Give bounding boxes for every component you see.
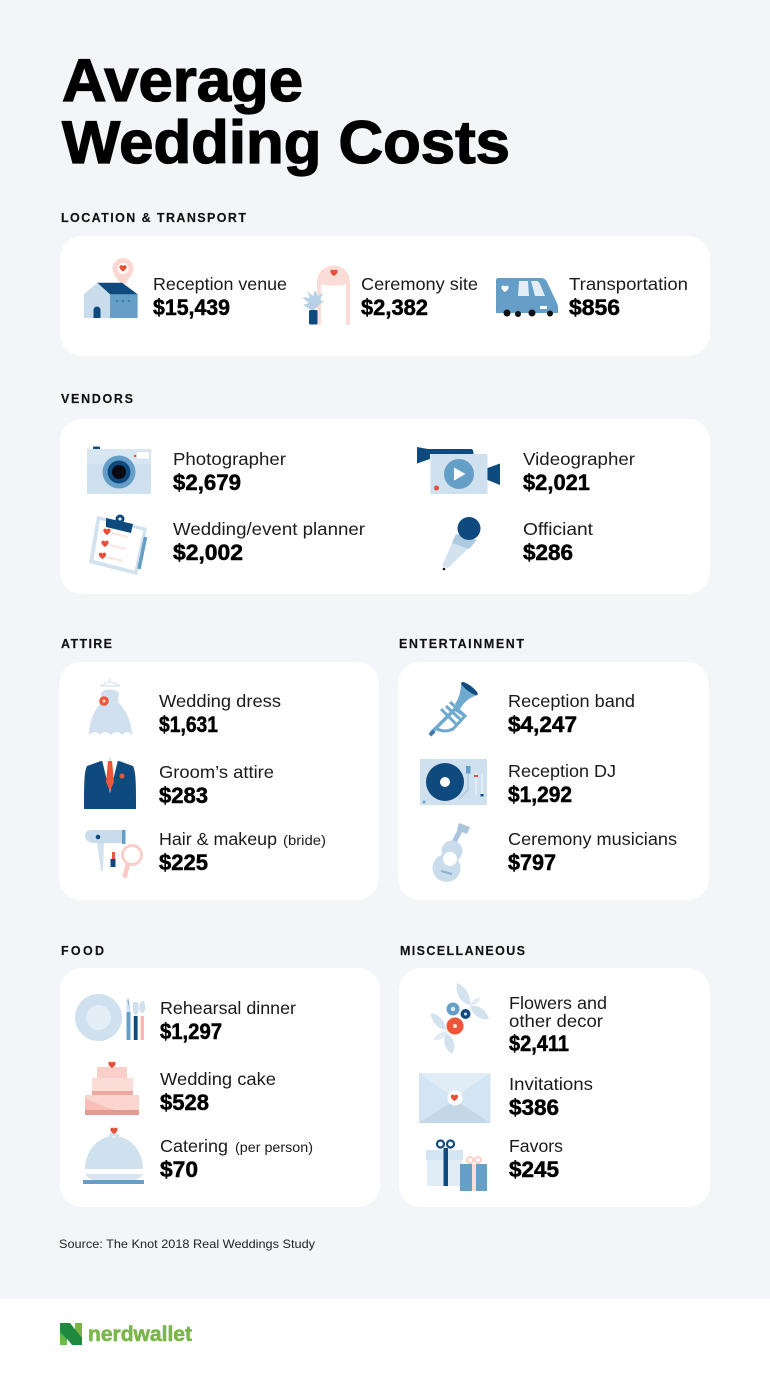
icon: invitation envelope — [419, 1073, 490, 1123]
text: groom's attire — [159, 762, 274, 808]
icon: clipboard — [89, 514, 147, 575]
text: wedding cake: $528 — [160, 1090, 209, 1115]
text: groom's attire: Groom’s attire — [159, 762, 274, 782]
text: wedding/event planner — [173, 519, 365, 565]
icon: wedding dress — [89, 678, 132, 735]
text: reception dj — [508, 761, 616, 807]
text: invitations: $386 — [509, 1095, 559, 1120]
icon: camera — [87, 446, 151, 494]
text: videographer: $2,021 — [523, 470, 590, 495]
text: wedding/event planner: $2,002 — [173, 540, 243, 565]
icon: microphone — [442, 517, 480, 570]
logo mark — [60, 1323, 82, 1345]
icon: hair and makeup — [85, 830, 142, 876]
text: flowers and other decor — [509, 993, 607, 1056]
text: favors: Favors — [509, 1136, 563, 1156]
icon: trumpet — [428, 680, 479, 737]
text: hair and makeup: (bride) — [283, 833, 326, 848]
text: ceremony site — [361, 274, 478, 320]
text: rehearsal dinner — [160, 998, 296, 1044]
text: reception band: Reception band — [508, 691, 635, 711]
text: officiant: $286 — [523, 540, 573, 565]
text: ceremony site: Ceremony site — [361, 274, 478, 294]
text: ceremony musicians: Ceremony musicians — [508, 829, 677, 849]
text: catering: Catering — [160, 1136, 228, 1156]
text: ceremony musicians — [508, 829, 677, 875]
text: photographer: $2,679 — [173, 470, 241, 495]
text: hair and makeup — [159, 829, 326, 875]
text: catering — [160, 1136, 313, 1182]
text: catering: $70 — [160, 1157, 198, 1182]
source note: Source: The Knot 2018 Real Weddings Study — [59, 1237, 315, 1251]
icon: place setting — [75, 994, 145, 1041]
text: videographer — [523, 449, 635, 495]
text: ceremony site: $2,382 — [361, 295, 428, 320]
title: Wedding Costs — [62, 109, 510, 176]
text: catering: (per person) — [235, 1140, 313, 1155]
text: reception venue: $15,439 — [153, 295, 230, 320]
text: transportation — [569, 274, 688, 320]
text: wedding cake: Wedding cake — [160, 1069, 276, 1089]
heading: food: FOOD — [61, 944, 104, 958]
text: photographer: Photographer — [173, 449, 286, 469]
text: groom's attire: $283 — [159, 783, 208, 808]
icon: catering cloche — [83, 1128, 144, 1184]
heading: vendors: VENDORS — [61, 392, 133, 406]
heading: miscellaneous: MISCELLANEOUS — [400, 944, 525, 958]
icon: favors gifts — [426, 1140, 487, 1191]
text: hair and makeup: $225 — [159, 850, 208, 875]
heading: attire: ATTIRE — [61, 637, 112, 651]
icon: guitar — [432, 823, 470, 882]
title: Average — [62, 47, 303, 114]
text: favors — [509, 1136, 563, 1182]
logo wordmark: nerdwallet — [88, 1323, 192, 1346]
text: reception dj: Reception DJ — [508, 761, 616, 781]
logo: nerdwallet — [60, 1323, 192, 1346]
heading: location and transport: LOCATION & TRANSPORT — [61, 211, 246, 225]
icon: transportation van — [496, 278, 558, 317]
text: reception dj: $1,292 — [508, 782, 572, 807]
panel: food — [60, 968, 380, 1207]
panel: miscellaneous — [399, 968, 710, 1207]
text: flowers and other decor: other decor — [509, 1011, 603, 1031]
panel: entertainment — [398, 662, 709, 900]
text: ceremony musicians: $797 — [508, 850, 556, 875]
text: rehearsal dinner: $1,297 — [160, 1019, 222, 1044]
icon: turntable — [420, 759, 487, 805]
text: officiant — [523, 519, 593, 565]
icon: ceremony arch — [302, 266, 350, 325]
panel: vendors — [60, 419, 710, 594]
icon: reception venue house with pin — [84, 258, 138, 318]
text: hair and makeup: Hair & makeup — [159, 829, 277, 849]
text: wedding dress: Wedding dress — [159, 691, 281, 711]
panel: attire — [59, 662, 379, 900]
text: wedding dress — [159, 691, 281, 737]
text: invitations — [509, 1074, 593, 1120]
text: reception venue: Reception venue — [153, 274, 287, 294]
text: videographer: Videographer — [523, 449, 635, 469]
text: flowers and other decor: $2,411 — [509, 1031, 569, 1056]
icon: video camera — [417, 447, 500, 494]
footer — [0, 1299, 770, 1373]
text: reception band — [508, 691, 635, 737]
text: officiant: Officiant — [523, 519, 593, 539]
text: transportation: $856 — [569, 295, 620, 320]
text: flowers and other decor: Flowers and — [509, 993, 607, 1013]
title — [62, 47, 510, 176]
text: photographer — [173, 449, 286, 495]
text: rehearsal dinner: Rehearsal dinner — [160, 998, 296, 1018]
text: favors: $245 — [509, 1157, 559, 1182]
icon: wedding cake — [85, 1062, 139, 1115]
icon: groom's attire — [84, 757, 136, 809]
text: transportation: Transportation — [569, 274, 688, 294]
text: wedding cake — [160, 1069, 276, 1115]
text: wedding dress: $1,631 — [159, 712, 218, 737]
text: reception venue — [153, 274, 287, 320]
heading: entertainment: ENTERTAINMENT — [399, 637, 524, 651]
text: invitations: Invitations — [509, 1074, 593, 1094]
icon: flowers — [431, 983, 489, 1054]
panel: location and transport — [60, 236, 710, 356]
text: reception band: $4,247 — [508, 712, 577, 737]
text: wedding/event planner: Wedding/event planner — [173, 519, 365, 539]
